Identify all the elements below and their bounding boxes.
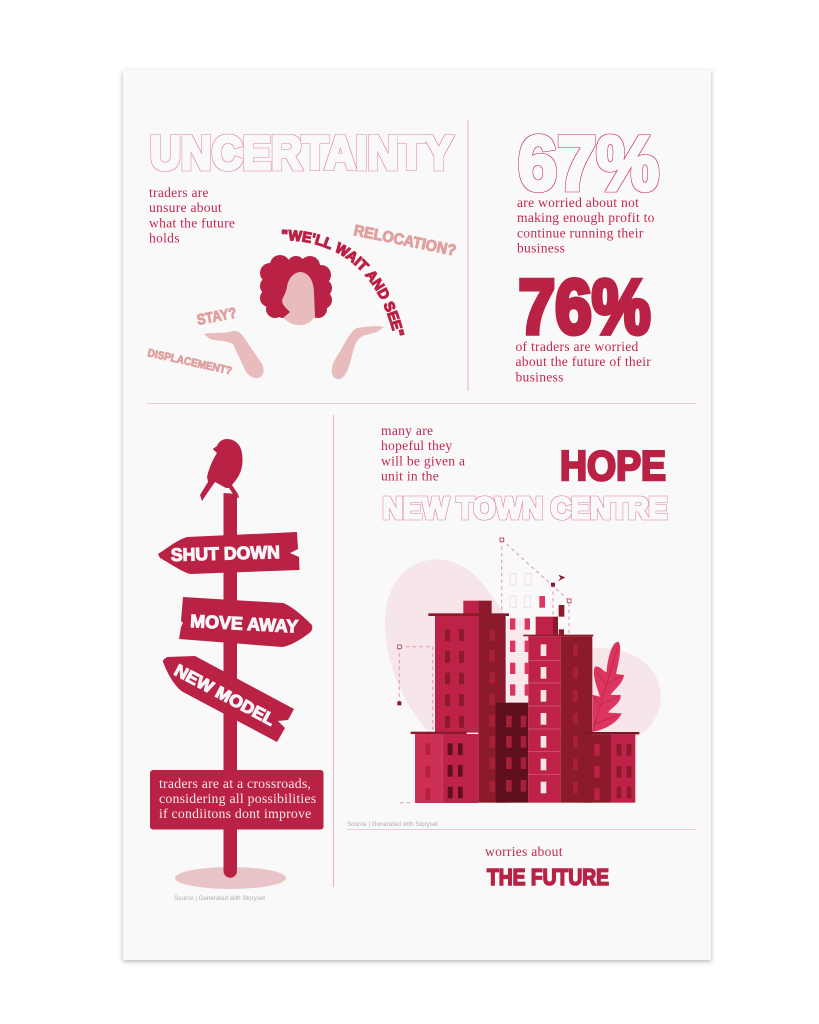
text: many hopeful: will be given a — [381, 453, 465, 468]
panel: uncertainty — [146, 126, 458, 380]
panel: hope — [347, 423, 668, 828]
heading: new town centre: NEW TOWN CENTRE — [382, 490, 668, 526]
text: worries about: worries about — [485, 844, 563, 859]
text: 67 description: making enough profit to — [517, 210, 655, 225]
heading: uncertainty: UNCERTAINTY — [150, 126, 453, 179]
callout: crossroads: if condiitons dont improve — [159, 806, 312, 821]
panel: future — [485, 844, 609, 890]
text: traders unsure: what the future — [149, 215, 235, 230]
text: many hopeful: hopeful they — [381, 438, 452, 453]
illustration: buildings — [385, 538, 661, 803]
text: many hopeful: many are — [381, 423, 433, 438]
text: traders unsure: unsure about — [149, 200, 222, 215]
heading: hope: HOPE — [560, 442, 666, 489]
callout: crossroads: considering all possibilities — [159, 791, 316, 806]
stat: 67 percent: 67% — [518, 121, 659, 207]
label: relocation: RELOCATION? — [352, 222, 458, 260]
icon: woman with raised hands — [204, 255, 384, 379]
panel: crossroads signpost — [150, 439, 324, 902]
sign: shut down — [158, 532, 300, 574]
text: many hopeful: unit in the — [381, 469, 439, 484]
poster card — [123, 70, 711, 960]
callout: crossroads — [150, 770, 324, 830]
panel: statistics — [516, 121, 659, 384]
sign: new model — [163, 656, 294, 742]
label: stay: STAY? — [196, 305, 238, 329]
stat: 76 percent: 76% — [518, 264, 650, 350]
text: 67 description: continue running their — [517, 225, 644, 240]
shadow ellipse — [175, 867, 286, 889]
heading: the future: THE FUTURE — [487, 864, 609, 890]
label: displacement: DISPLACEMENT? — [146, 347, 233, 378]
text: 67 description: business — [517, 241, 565, 256]
text: traders unsure: traders are — [149, 185, 209, 200]
sign: new model: NEW MODEL — [171, 661, 278, 730]
curved quote — [281, 240, 395, 340]
text: 76 description: of traders are worried — [516, 339, 639, 354]
source note: Source | Generated with Storyset — [347, 821, 438, 828]
text: 67 description: are worried about not — [517, 195, 639, 210]
text: traders unsure: holds — [149, 231, 180, 246]
panel: uncertainty: "WE'LL WAIT AND SEE" — [282, 229, 405, 336]
sign: shut down: SHUT DOWN — [171, 542, 280, 565]
icon: bird — [200, 439, 243, 501]
sign: move away: MOVE AWAY — [190, 611, 299, 637]
source note: Source | Generated with Storyset — [174, 895, 265, 902]
text: 76 description: business — [516, 369, 564, 384]
sign: move away — [179, 597, 312, 647]
signpost pole — [224, 493, 237, 878]
callout: crossroads: traders are at a crossroads, — [159, 776, 311, 791]
text: 76 description: about the future of their — [516, 354, 651, 369]
